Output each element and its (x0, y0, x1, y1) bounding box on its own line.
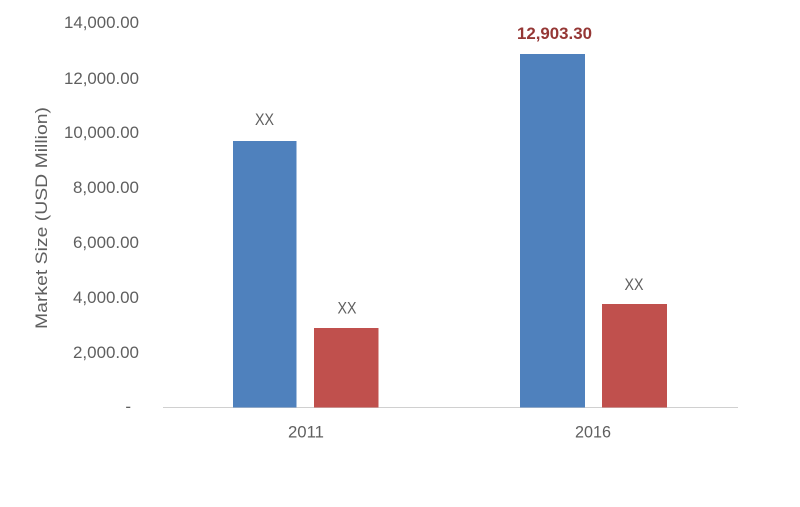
y-axis tick labels: 8,000.00 (73, 178, 139, 197)
y-axis tick labels: 14,000.00 (64, 13, 139, 32)
y-axis tick labels: 4,000.00 (73, 288, 139, 307)
y-axis tick labels (64, 13, 139, 416)
y-axis title: Market Size (USD Million) (32, 107, 51, 329)
value label: 2011 red: XX (338, 298, 356, 318)
value label: 2016 red: XX (624, 275, 644, 294)
y-axis tick labels: 10,000.00 (64, 123, 139, 142)
y-axis tick labels: 2,000.00 (73, 343, 139, 362)
value label: 2016 blue: 12,903.30 (517, 24, 592, 43)
bar: 2011 red (314, 328, 378, 408)
value label: 2011 blue: XX (255, 110, 274, 129)
x-axis label: 2016: 2016 (575, 422, 611, 442)
y-axis tick labels: - (125, 397, 131, 416)
x-axis label: 2011: 2011 (288, 422, 324, 442)
y-axis tick labels: 12,000.00 (64, 69, 139, 88)
bar: 2011 blue (233, 141, 296, 408)
x-axis line (163, 406, 738, 408)
bar: 2016 blue (520, 54, 585, 408)
bar: 2016 red (602, 304, 667, 408)
y-axis tick labels: 6,000.00 (73, 233, 139, 252)
